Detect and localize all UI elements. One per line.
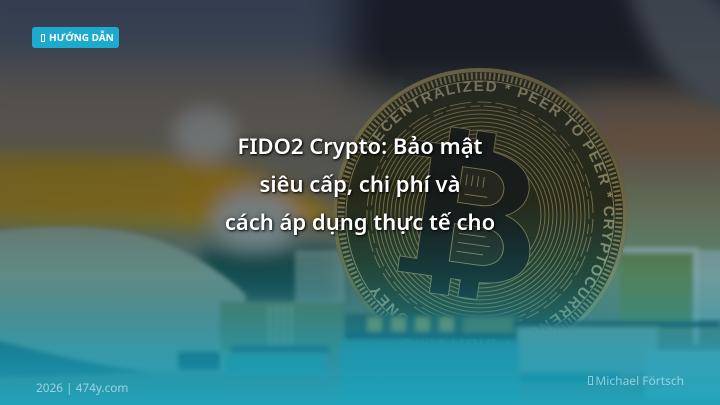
bitcoin coin (333, 68, 627, 328)
rim lettering: DECENTRALIZED * PEER TO PEER * CRYPTOCURRENCY * DIGITAL MONEY (365, 80, 614, 328)
connector strip hiding the coin base (340, 314, 720, 401)
bitcoin B symbol (395, 122, 546, 306)
title: siêu cấp, chi phí và (260, 169, 460, 199)
circuit board, lower area (0, 250, 720, 378)
title: cách áp dụng thực tế cho (225, 207, 495, 237)
pale rounded object, lower left (0, 227, 246, 372)
category badge: HƯỚNG DẪN (49, 30, 114, 44)
title: FIDO2 Crypto: Bảo mật (238, 131, 482, 161)
footer: year and site: 2026 | 474y.com (36, 380, 128, 396)
concentric circuit traces (346, 81, 614, 349)
footer: photo credit: Michael Förtsch (595, 372, 684, 389)
category badge (32, 27, 119, 48)
B counters with circuit detail (449, 167, 514, 268)
title (224, 131, 496, 238)
